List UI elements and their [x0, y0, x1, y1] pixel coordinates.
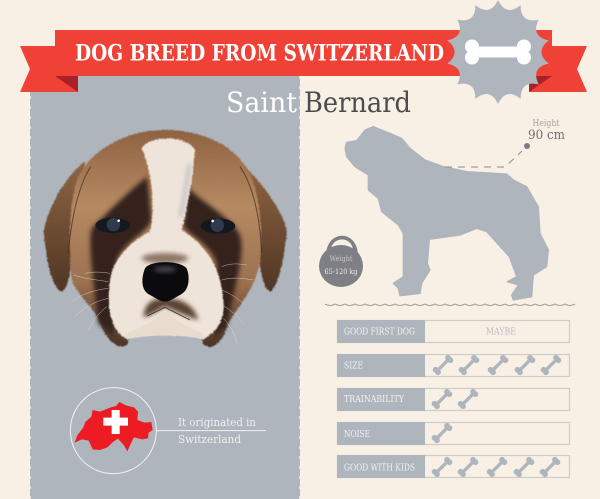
ribbon left fold — [55, 76, 78, 92]
rating row: good first dog — [337, 320, 570, 343]
bone ratings: 5 — [433, 355, 561, 375]
bone ratings: 2 — [432, 389, 478, 409]
whiskers — [72, 264, 253, 343]
row value: MAYBE — [486, 326, 516, 338]
row label: GOOD WITH KIDS — [344, 462, 415, 474]
muzzle shadow — [142, 253, 188, 264]
weight kettlebell — [319, 236, 363, 287]
kettlebell body — [319, 245, 363, 287]
height value: 90 cm — [528, 128, 565, 143]
icon: white bone — [465, 40, 531, 64]
blaze shadow — [180, 163, 190, 217]
eye patch right — [183, 187, 241, 337]
row frame — [338, 320, 570, 342]
bone ratings: 1 — [432, 423, 452, 443]
row frame — [338, 422, 570, 444]
circle outline — [70, 388, 156, 474]
ribbon left tail — [20, 46, 78, 92]
ear crease left — [68, 167, 91, 253]
row label: GOOD FIRST DOG — [344, 326, 415, 338]
row frame — [338, 388, 570, 410]
mouth line — [147, 307, 190, 320]
ear left — [44, 162, 85, 292]
height dashed line — [445, 151, 522, 167]
row label box — [337, 320, 425, 343]
row frame — [338, 354, 570, 376]
dog silhouette — [345, 127, 548, 300]
Swiss cross — [103, 410, 128, 434]
height callout — [445, 119, 565, 167]
ear crease right — [240, 167, 262, 253]
starburst — [447, 0, 549, 104]
wavy divider — [325, 304, 575, 306]
row label box — [337, 455, 425, 478]
row label: TRAINABILITY — [344, 394, 405, 405]
connector line — [157, 429, 266, 432]
rating row: good with kids — [337, 455, 570, 478]
row label box — [337, 422, 425, 445]
nose highlight — [154, 266, 176, 272]
banner title: DOG BREED FROM SWITZERLAND — [75, 40, 444, 66]
ear right — [242, 163, 287, 292]
origin: map in circle — [70, 388, 266, 474]
ribbon right fold — [529, 76, 552, 92]
bone ratings: 5 — [432, 457, 560, 477]
row label box — [337, 354, 425, 377]
weight value: 65-120 kg — [324, 268, 358, 276]
ribbon main band — [55, 30, 552, 76]
map of Switzerland — [75, 402, 153, 451]
eye left — [95, 218, 130, 233]
head fur — [70, 130, 261, 347]
origin text — [178, 415, 257, 446]
breed name: Saint: Saint — [226, 86, 298, 119]
white blaze and muzzle — [109, 139, 224, 339]
row label box — [337, 388, 425, 411]
height label: Height — [532, 119, 560, 129]
ribbon banner — [20, 30, 587, 92]
origin line 2: Switzerland — [178, 432, 242, 446]
weight label: Weight — [330, 255, 353, 263]
rating row: size — [337, 354, 570, 377]
rating row: noise — [337, 422, 570, 445]
eye right — [201, 218, 235, 234]
dog face portrait — [44, 130, 287, 347]
chin — [127, 309, 203, 339]
breed name: Bernard: Bernard — [304, 86, 411, 119]
eye patch left — [90, 177, 152, 337]
height dot — [524, 143, 530, 149]
row frame — [338, 456, 570, 478]
kettlebell handle — [326, 236, 358, 256]
badge: starburst with bone — [447, 0, 549, 104]
row label: NOISE — [344, 429, 370, 440]
ribbon right tail — [529, 46, 587, 92]
panel: dog portrait and origin — [30, 76, 300, 499]
nose — [142, 262, 189, 302]
row label: SIZE — [344, 360, 363, 372]
rating row: trainability — [337, 388, 570, 411]
breed name — [226, 86, 411, 119]
mouth shading — [143, 298, 198, 320]
origin line 1: It originated in — [178, 415, 257, 429]
